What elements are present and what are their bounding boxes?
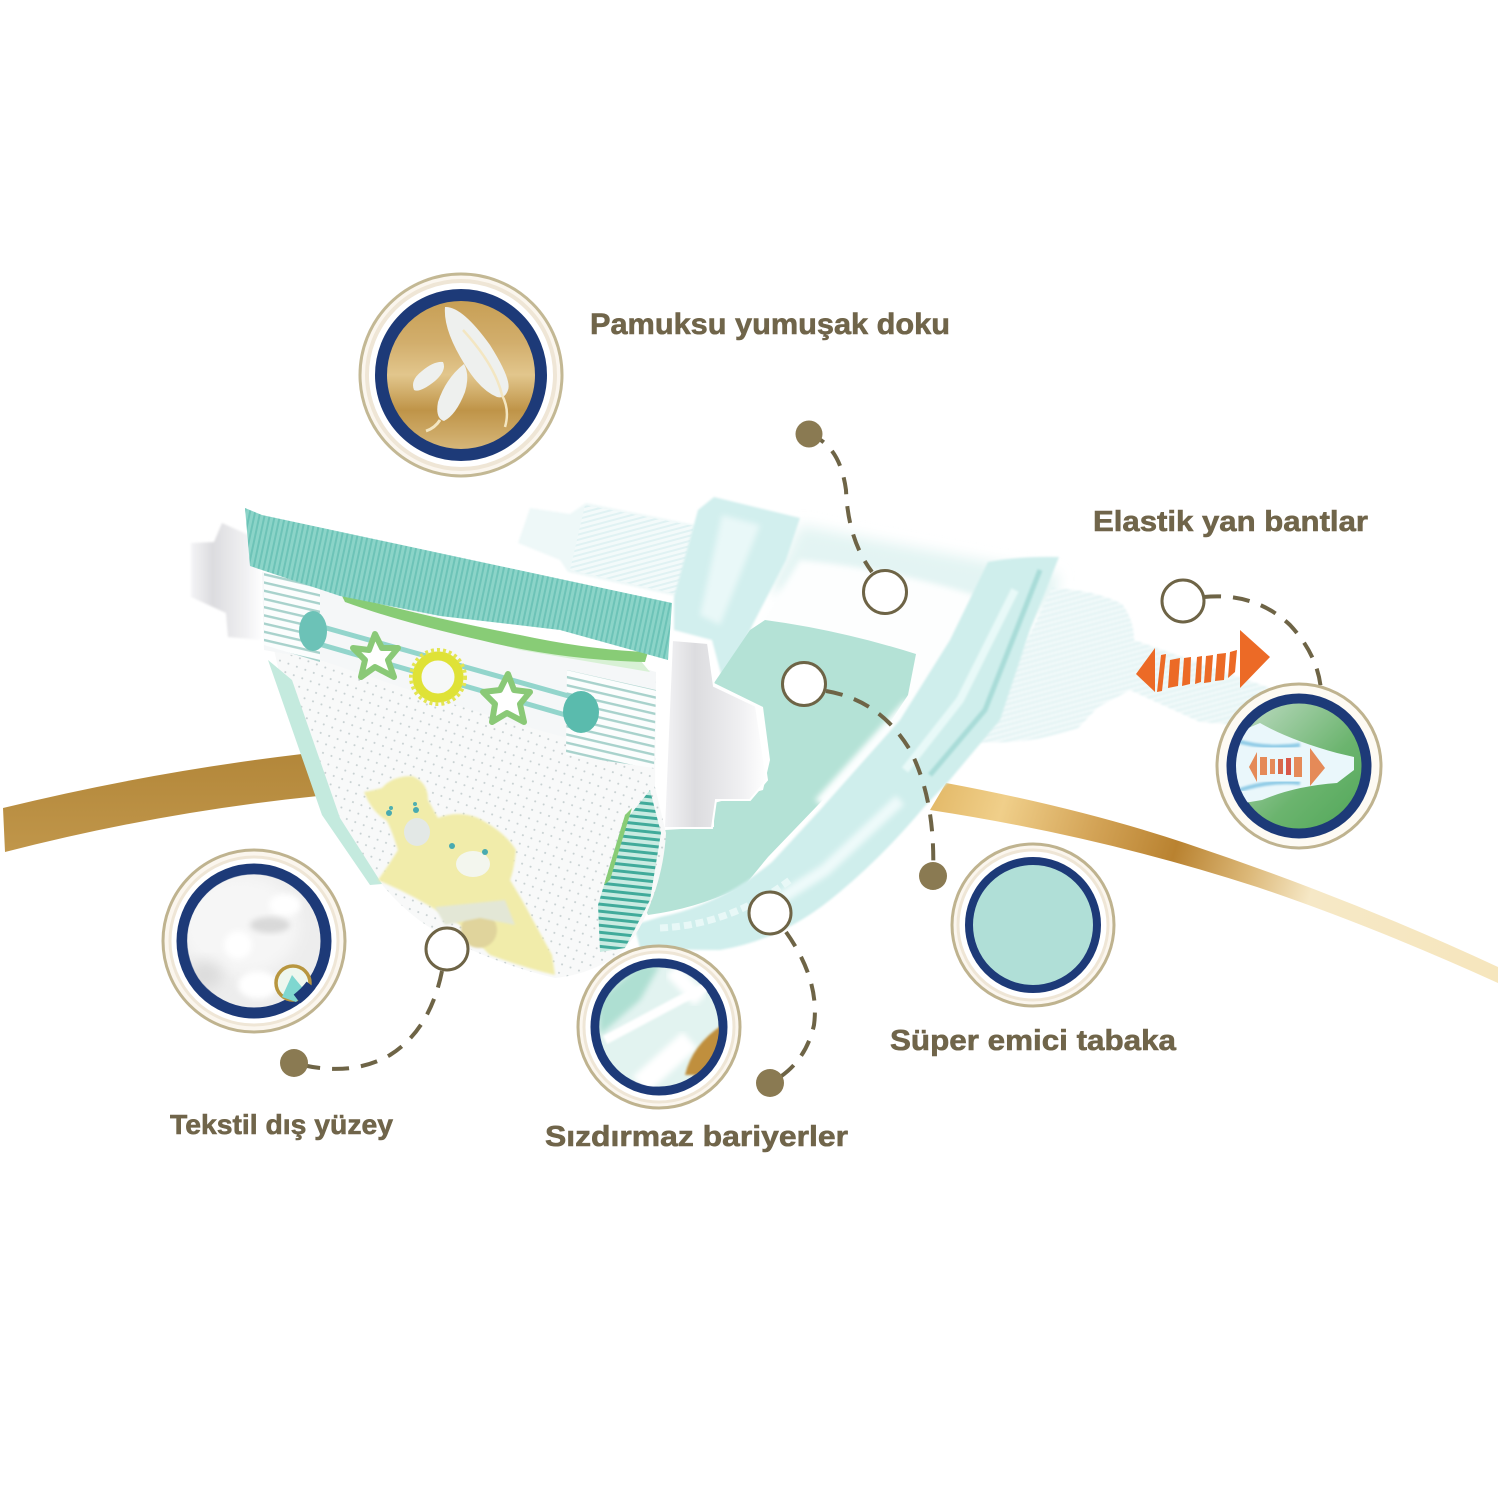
- star left: [353, 634, 398, 677]
- teal strip: [305, 622, 590, 722]
- callout: outer surface leader: [280, 928, 468, 1077]
- waistband teal: [245, 508, 672, 660]
- icon: feathers: [413, 307, 509, 431]
- badge: elastic: [1217, 684, 1381, 848]
- label: Elastik yan bantlar: Elastik yan bantlar: [1093, 506, 1368, 538]
- badge: feather: [360, 274, 562, 476]
- icon: orange stretch arrow: [1136, 630, 1270, 692]
- diaper illustration: [191, 497, 1270, 978]
- left ear tab: [191, 523, 263, 640]
- green trim: [341, 594, 648, 662]
- sun: [411, 650, 465, 704]
- label: Pamuksu yumuşak doku: Pamuksu yumuşak doku: [590, 308, 950, 341]
- front pale patterned waist: [262, 572, 656, 762]
- callout: core leader: [782, 662, 947, 890]
- star right: [483, 674, 530, 722]
- label: Tekstil dış yüzey: Tekstil dış yüzey: [170, 1109, 393, 1140]
- back left cuff: [674, 497, 800, 685]
- icon: small inset: [276, 966, 310, 1002]
- right elastic side band: [978, 588, 1270, 742]
- label: Sızdırmaz bariyerler: Sızdırmaz bariyerler: [545, 1121, 848, 1153]
- back top left ear: [518, 503, 695, 596]
- right ear tab: [664, 640, 767, 828]
- pale green band: [340, 598, 650, 672]
- top sheet highlights: [815, 700, 950, 830]
- gold swoosh right: [930, 783, 1498, 983]
- snap teal right: [563, 691, 599, 733]
- callout: top dashed leader: [796, 420, 906, 614]
- badge: textile surface: [163, 850, 345, 1032]
- snap teal left: [299, 611, 327, 651]
- icon: small orange arrow: [1249, 748, 1325, 786]
- bear cubs print: [364, 776, 555, 975]
- callout: barrier leader: [749, 892, 815, 1097]
- absorbent core: [634, 620, 916, 915]
- badge: absorbent layer: [952, 844, 1114, 1006]
- green side edge left: [268, 660, 382, 885]
- right cuff: [634, 557, 1059, 950]
- gold swoosh left: [3, 754, 318, 852]
- hook tape right: [566, 670, 656, 768]
- back side panel faint: [770, 525, 1060, 660]
- front panel: [262, 572, 666, 978]
- hook tape left: [264, 572, 320, 662]
- leg cuff stripes: [598, 790, 661, 952]
- callout: elastic leader: [1162, 580, 1321, 690]
- back inner white area: [750, 560, 990, 810]
- label: Süper emici tabaka: Süper emici tabaka: [890, 1025, 1177, 1057]
- badge: barrier: [578, 946, 740, 1108]
